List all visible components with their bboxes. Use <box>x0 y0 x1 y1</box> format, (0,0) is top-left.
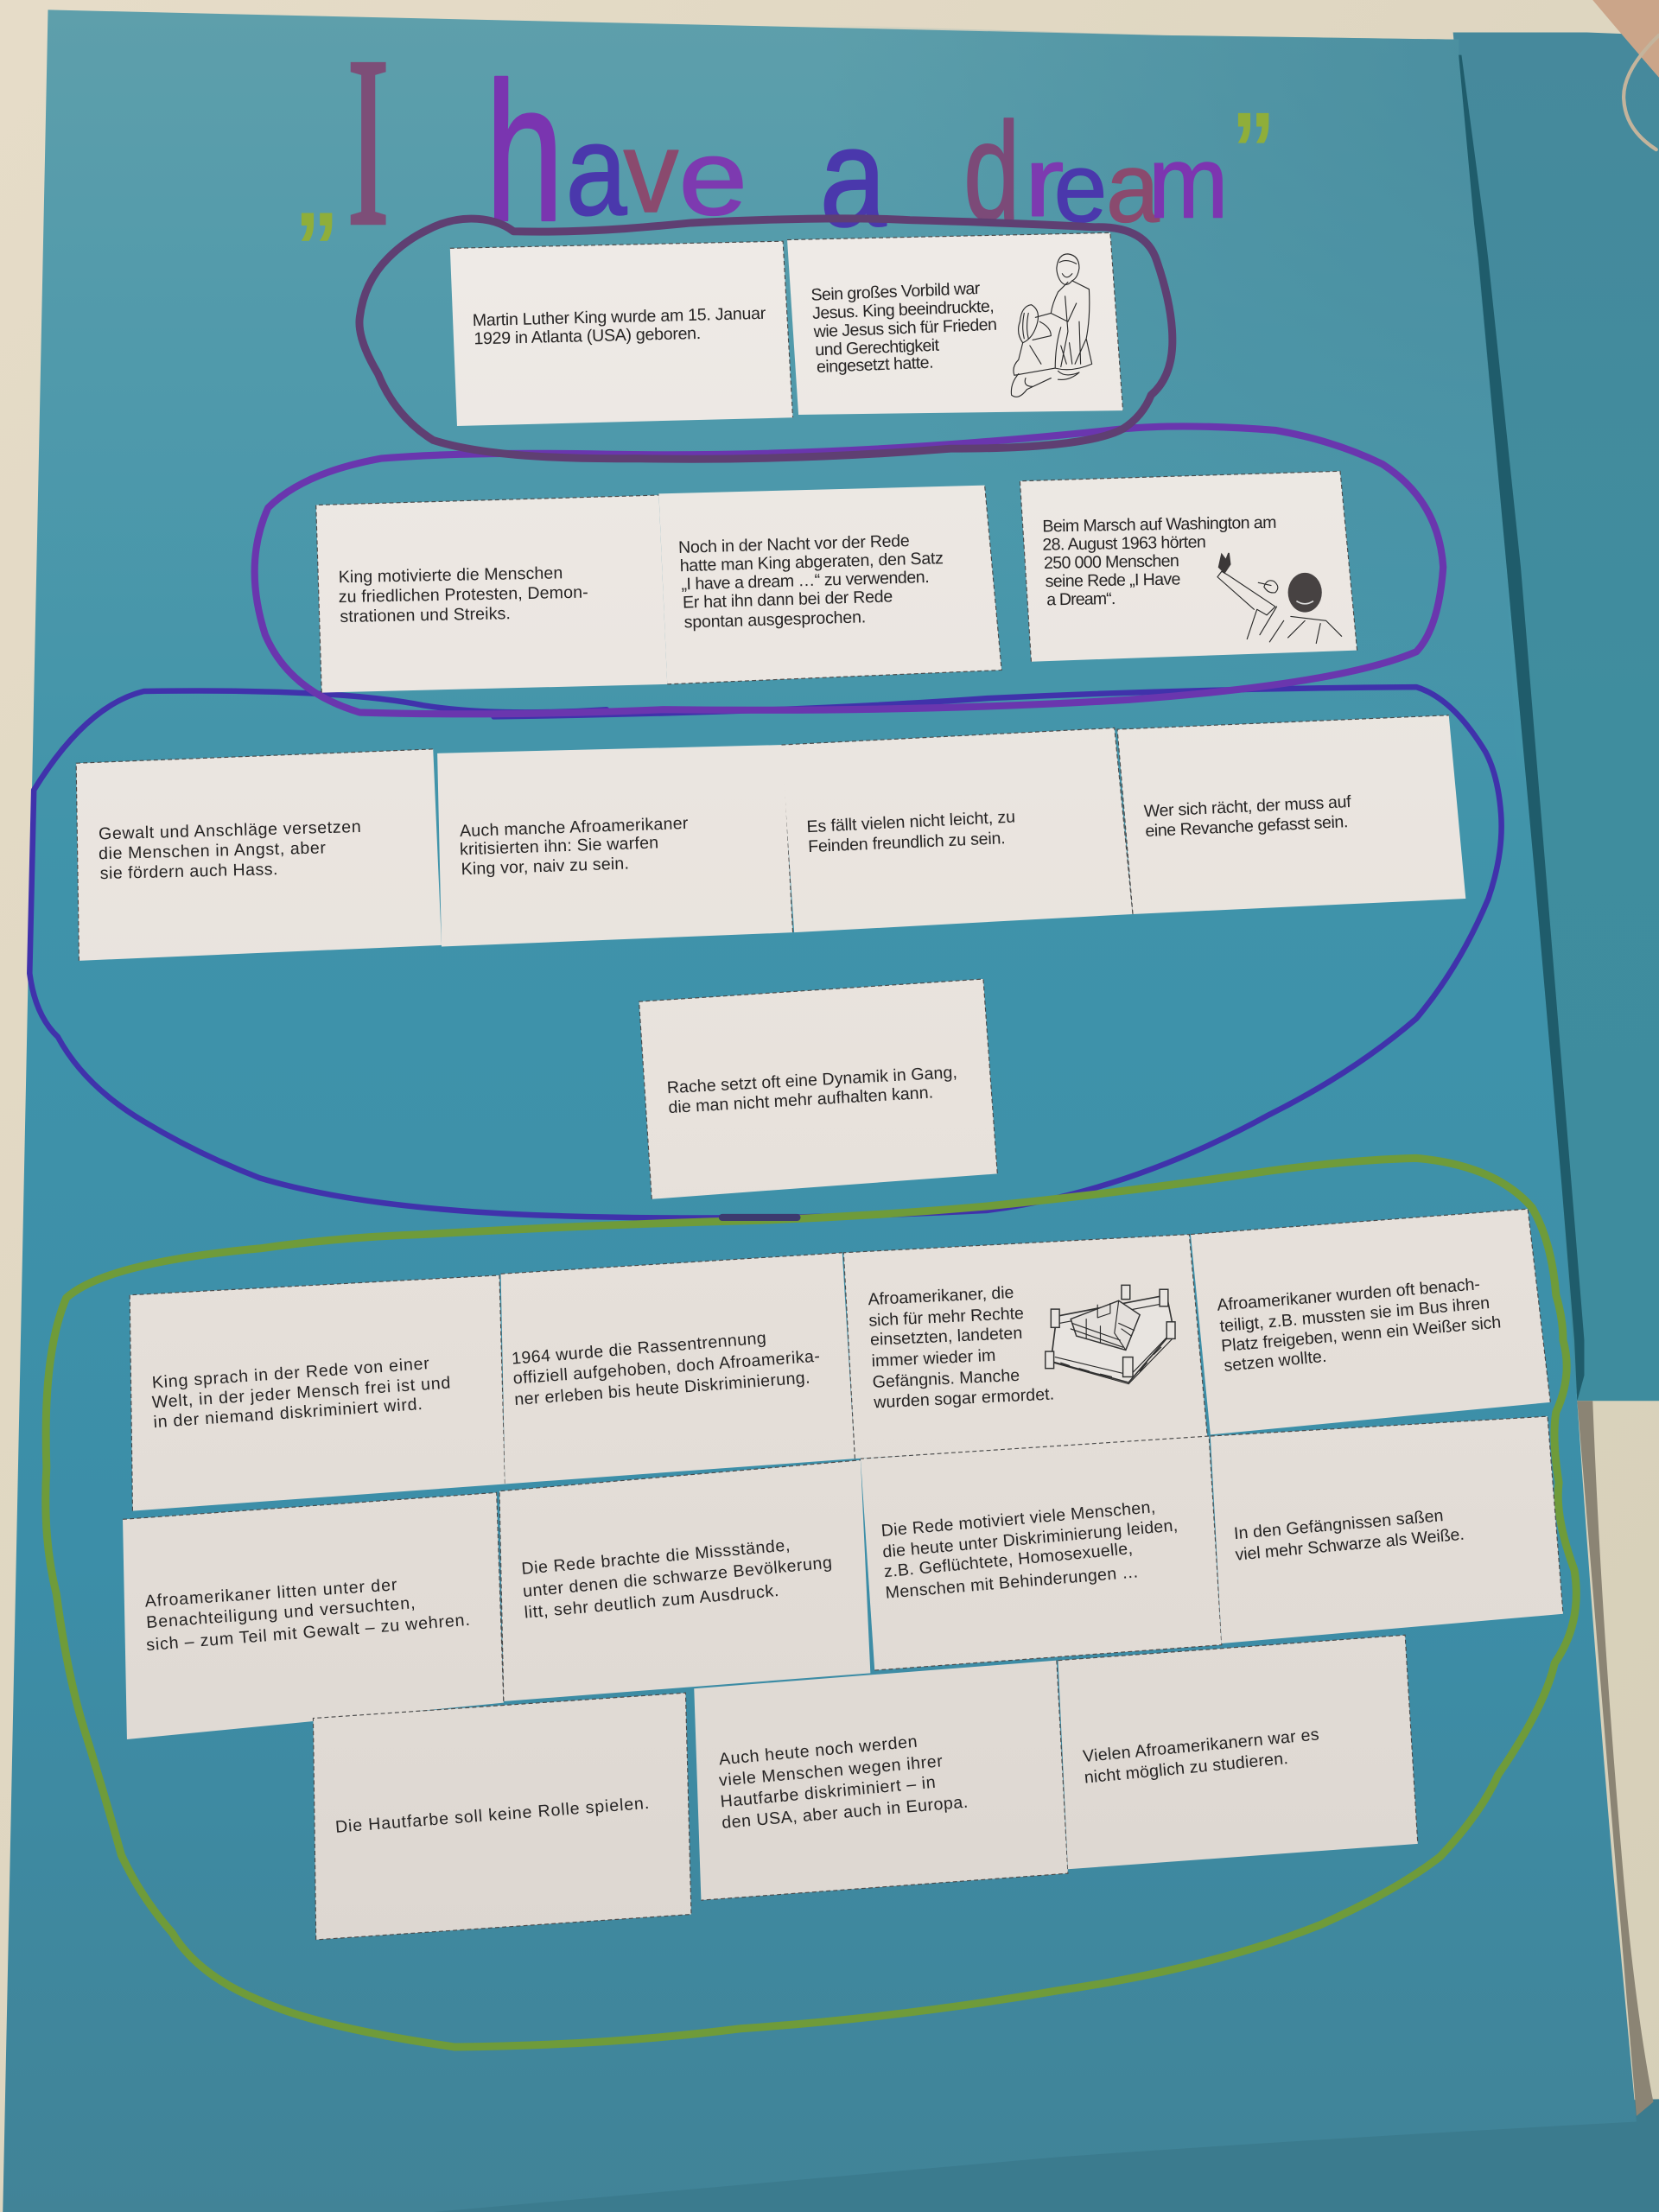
card: 1964 end of segregation: ner erleben bis heute Diskriminierung. <box>514 1368 810 1409</box>
card: Jesus as role model: Sein großes Vorbild war <box>810 279 981 305</box>
card: bus seats: Platz freigeben, wenn ein Weißer sich <box>1220 1313 1502 1356</box>
card: birth of Martin Luther King: 1929 in Atlanta (USA) geboren. <box>474 324 701 348</box>
card: revenge: eine Revanche gefasst sein. <box>1145 812 1349 841</box>
card: suffering and resistance: Afroamerikaner litten unter der <box>144 1575 398 1611</box>
title letter I: I <box>347 8 390 276</box>
card: Jesus as role model: und Gerechtigkeit <box>815 336 940 359</box>
card: birth of Martin Luther King: Martin Luther King wurde am 15. Januar <box>473 304 766 330</box>
card: being friendly to enemies: Feinden freundlich zu sein. <box>808 829 1006 856</box>
card: criticism from African Americans: King vor, naiv zu sein. <box>461 854 629 879</box>
card: bus seats: Afroamerikaner wurden oft benach- <box>1217 1274 1481 1315</box>
card: discrimination today <box>694 1661 1068 1900</box>
card: the speech exposed grievances <box>499 1460 870 1701</box>
card: prison and murder: einsetzten, landeten <box>870 1324 1023 1350</box>
card: march on Washington: Beim Marsch auf Washington am <box>1042 513 1277 537</box>
outline: third group blue <box>29 687 1502 1218</box>
card: prison and murder: immer wieder im <box>871 1346 996 1371</box>
card: violence and fear: Gewalt und Anschläge versetzen <box>99 817 361 843</box>
card: being friendly to enemies <box>781 728 1133 932</box>
card: bus seats: setzen wollte. <box>1224 1347 1327 1376</box>
title word a: a <box>820 99 887 257</box>
card: suffering and resistance <box>123 1492 504 1739</box>
card: Jesus as role model: eingesetzt hatte. <box>817 353 934 377</box>
card: the speech exposed grievances: unter denen die schwarze Bevölkerung <box>522 1553 833 1601</box>
card: 1964 end of segregation: 1964 wurde die Rassentrennung <box>511 1329 767 1369</box>
card: discrimination today: Hautfarbe diskriminiert – in <box>720 1773 937 1811</box>
card: prison population: In den Gefängnissen saßen <box>1233 1506 1444 1543</box>
card: dynamic of revenge <box>639 979 997 1199</box>
card: the night before the speech: spontan ausgesprochen. <box>683 607 867 632</box>
back sheet at right <box>1453 33 1659 1401</box>
title closing quote: ” <box>1231 90 1275 209</box>
poster edge shadow <box>1459 55 1584 1401</box>
card: discrimination today: viele Menschen wegen ihrer <box>718 1751 944 1790</box>
title word have: v <box>624 107 678 237</box>
card: suffering and resistance: Benachteiligung und versuchten, <box>146 1593 416 1632</box>
card: dynamic of revenge: Rache setzt oft eine Dynamik in Gang, <box>666 1063 957 1097</box>
title word dream: e <box>1054 132 1107 243</box>
card: discrimination today: Auch heute noch werden <box>718 1732 918 1769</box>
card: the speech motivates many people <box>861 1436 1222 1670</box>
card: birth of Martin Luther King <box>450 241 793 426</box>
card: dynamic of revenge: die man nicht mehr aufhalten kann. <box>668 1084 934 1117</box>
card: bus seats: teiligt, z.B. mussten sie im Bus ihren <box>1219 1294 1491 1336</box>
card: the speech motivates many people: Menschen mit Behinderungen … <box>885 1562 1140 1603</box>
card: skin colour <box>313 1693 691 1940</box>
card: march on Washington: 28. August 1963 hörten <box>1042 532 1206 555</box>
card: peaceful protests <box>316 495 667 693</box>
title word dream <box>963 93 1228 248</box>
card: march on Washington: 250 000 Menschen <box>1044 551 1179 573</box>
card: the speech exposed grievances: litt, sehr deutlich zum Ausdruck. <box>524 1581 779 1623</box>
card: march on Washington: seine Rede „I Have <box>1045 569 1181 591</box>
outline: second group purple <box>255 426 1443 714</box>
card: the night before the speech: Er hat ihn dann bei der Rede <box>683 587 893 613</box>
icon: prison building <box>1046 1285 1175 1384</box>
outline: fourth group green <box>46 1158 1576 2047</box>
card: peaceful protests: zu friedlichen Protesten, Demon- <box>339 583 588 607</box>
card: prison and murder: wurden sogar ermordet. <box>873 1385 1055 1412</box>
card: no access to university: nicht möglich zu studieren. <box>1084 1749 1289 1788</box>
card: the speech motivates many people: z.B. Geflüchtete, Homosexuelle, <box>883 1539 1134 1581</box>
bracelet <box>1624 35 1659 149</box>
hand at top right corner <box>1592 0 1659 78</box>
card: revenge: Wer sich rächt, der muss auf <box>1143 792 1352 821</box>
shadow under poster on wall <box>1577 1401 1653 2116</box>
card: being friendly to enemies: Es fällt vielen nicht leicht, zu <box>806 807 1015 836</box>
icon: Jesus and kneeling figure <box>1011 254 1092 397</box>
card: prison and murder <box>843 1235 1208 1459</box>
card: the speech motivates many people: die heute unter Diskriminierung leiden, <box>882 1516 1179 1561</box>
card: a world without discrimination: King sprach in der Rede von einer <box>151 1354 430 1393</box>
card: revenge <box>1117 715 1465 914</box>
title <box>295 8 1275 276</box>
card: the night before the speech: hatte man King abgeraten, den Satz <box>679 549 944 575</box>
card: discrimination today: den USA, aber auch in Europa. <box>721 1793 969 1833</box>
card: march on Washington: a Dream“. <box>1046 589 1116 609</box>
card: Jesus as role model: wie Jesus sich für Frieden <box>812 315 997 341</box>
overlap of blue and green outlines <box>722 1215 797 1219</box>
card: suffering and resistance: sich – zum Teil mit Gewalt – zu wehren. <box>145 1611 471 1655</box>
card: 1964 end of segregation: offiziell aufgehoben, doch Afroamerika- <box>512 1347 821 1389</box>
title word have: e <box>678 118 747 238</box>
outline: first group dark purple <box>359 219 1173 459</box>
icon: King speaking at microphone <box>1217 553 1342 643</box>
card: a world without discrimination: in der niemand diskriminiert wird. <box>153 1395 423 1432</box>
card: prison and murder: sich für mehr Rechte <box>868 1304 1024 1331</box>
title word have: h <box>486 42 563 263</box>
card: the speech motivates many people: Die Rede motiviert viele Menschen, <box>880 1497 1156 1541</box>
card: a world without discrimination <box>130 1275 505 1511</box>
card: skin colour: Die Hautfarbe soll keine Rolle spielen. <box>334 1794 650 1837</box>
card: the speech exposed grievances: Die Rede brachte die Missstände, <box>521 1535 791 1579</box>
card: bus seats <box>1191 1209 1550 1434</box>
title word dream: a <box>1106 132 1160 243</box>
title opening quote: „ <box>295 136 339 247</box>
card: 1964 end of segregation <box>501 1253 855 1484</box>
card: march on Washington <box>1020 471 1357 662</box>
card: prison and murder: Afroamerikaner, die <box>868 1283 1014 1309</box>
card: prison population <box>1211 1416 1563 1643</box>
title word have: a <box>566 97 627 243</box>
title word dream: m <box>1148 127 1228 239</box>
card: the night before the speech: „I have a dream …“ zu verwenden. <box>681 568 930 594</box>
card: the night before the speech: Noch in der Nacht vor der Rede <box>678 531 910 557</box>
card: Jesus as role model <box>787 232 1123 415</box>
card: prison and murder: Gefängnis. Manche <box>872 1366 1020 1392</box>
title word have <box>486 42 747 263</box>
card: violence and fear: sie fördern auch Hass. <box>100 860 278 883</box>
darker top right corner of poster <box>705 21 1516 776</box>
title word dream: r <box>1024 126 1065 237</box>
card: criticism from African Americans: kritisierten ihn: Sie warfen <box>460 833 658 859</box>
card: peaceful protests: King motivierte die Menschen <box>339 563 563 587</box>
card: violence and fear: die Menschen in Angst, aber <box>99 838 327 863</box>
card: criticism from African Americans: Auch manche Afroamerikaner <box>460 814 689 841</box>
card: the night before the speech <box>658 486 1001 684</box>
card: no access to university: Vielen Afroamerikanern war es <box>1082 1725 1320 1766</box>
card: violence and fear <box>76 749 442 961</box>
card: Jesus as role model: Jesus. King beeindruckte, <box>812 297 995 323</box>
bottom sheet <box>283 2099 1659 2212</box>
card: no access to university <box>1058 1635 1418 1869</box>
card: criticism from African Americans <box>437 745 793 947</box>
card: prison population: viel mehr Schwarze als Weiße. <box>1235 1525 1465 1565</box>
card: a world without discrimination: Welt, in der jeder Mensch frei ist und <box>151 1373 451 1412</box>
card: peaceful protests: strationen und Streiks. <box>340 604 511 626</box>
title word dream: d <box>963 93 1020 248</box>
